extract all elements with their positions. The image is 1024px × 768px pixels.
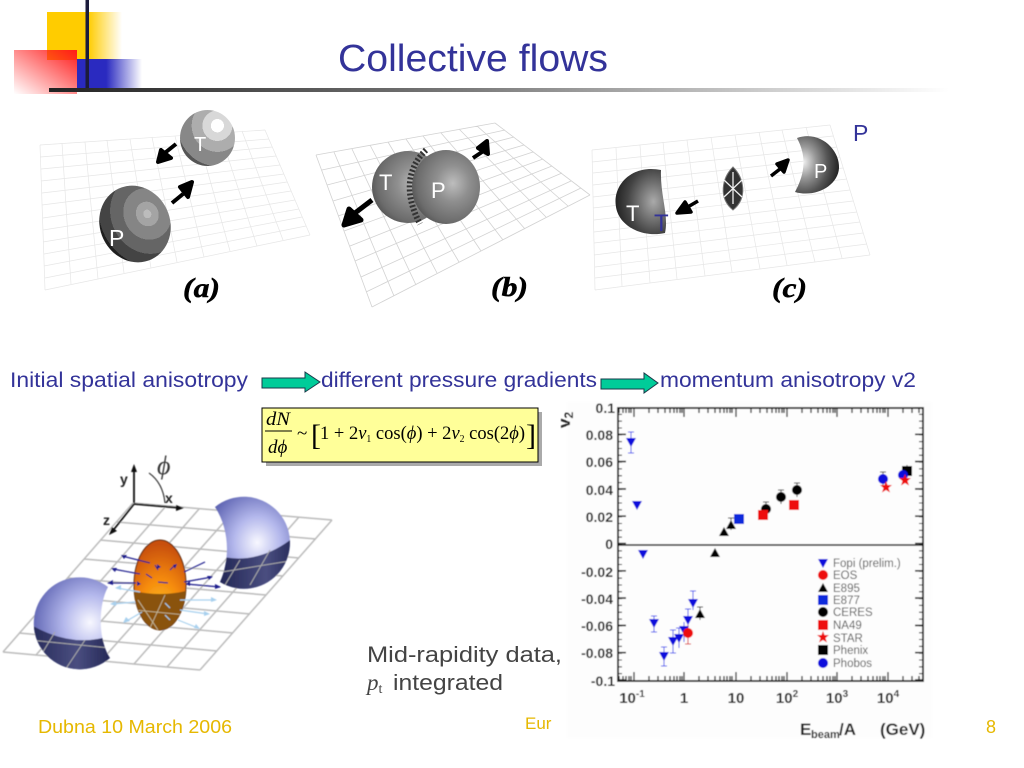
formula box: ϕ) + 2v xyxy=(407,423,460,444)
footer: date: Dubna 10 March 2006 xyxy=(38,717,232,737)
grid c xyxy=(592,125,870,290)
arrow to lower left xyxy=(158,144,176,162)
y tick labels: -0.08 xyxy=(581,645,613,661)
label z: z xyxy=(103,512,110,528)
legend: NA49 xyxy=(833,620,862,632)
y tick labels: -0.02 xyxy=(581,564,613,580)
white label T: T xyxy=(626,201,639,226)
mid-rapidity note: Mid-rapidity data, xyxy=(367,642,562,667)
label T: T xyxy=(379,170,392,195)
legend: Phenix xyxy=(833,645,868,657)
legend: E895 xyxy=(833,583,860,595)
y axis title: 2 xyxy=(562,412,576,419)
series: E895 xyxy=(695,520,736,618)
sphere P xyxy=(87,174,183,274)
formula box: ϕ) xyxy=(509,423,525,444)
statement: initial anisotropy: Initial spatial anisotropy xyxy=(10,369,249,392)
series: EOS xyxy=(683,628,693,638)
title rule xyxy=(49,88,949,92)
diagram: almond overlap with spectators xyxy=(3,451,332,680)
x tick labels: 2 xyxy=(793,689,799,700)
x ticks xyxy=(618,408,920,681)
collision speckle xyxy=(410,150,426,224)
x axis title xyxy=(800,720,925,741)
x tick labels: 10 xyxy=(776,690,793,707)
right spectator xyxy=(214,496,291,590)
chart: v2 versus beam energy xyxy=(555,400,936,741)
arrowheads navy xyxy=(107,555,221,589)
label x: x xyxy=(165,490,173,506)
panel a: approach of nuclei xyxy=(40,110,310,303)
label T: T xyxy=(194,134,206,156)
legend: STAR xyxy=(833,633,863,645)
arrow left xyxy=(677,201,698,213)
grid a xyxy=(40,130,310,290)
arrowheads light blue xyxy=(110,585,217,629)
x axis title: /A xyxy=(839,720,856,739)
x tick labels: 3 xyxy=(843,689,849,700)
footer: truncated text: Eur xyxy=(525,714,552,733)
panel b: overlap xyxy=(316,123,590,307)
blue label P: P xyxy=(853,120,868,146)
y tick labels: 0.08 xyxy=(586,427,613,443)
corner decoration xyxy=(14,0,142,94)
series: CERES xyxy=(761,485,802,514)
y tick labels xyxy=(581,400,615,689)
y tick labels: 0.02 xyxy=(586,509,613,525)
white label P: P xyxy=(814,161,827,183)
flow arrows: lower light blue xyxy=(112,588,215,628)
footer: page number: 8 xyxy=(986,717,996,737)
x tick labels: 1 xyxy=(680,690,688,707)
x axis title: E xyxy=(800,720,811,739)
statement: momentum anisotropy: momentum anisotropy v2 xyxy=(660,369,916,392)
formula box: ] xyxy=(526,419,536,452)
y tick labels: 0.1 xyxy=(596,400,615,416)
x tick labels: 4 xyxy=(894,689,900,700)
formula box: [ xyxy=(311,419,321,452)
legend: Fopi (prelim.) xyxy=(833,558,901,570)
grid b xyxy=(316,123,590,307)
phi symbol: ϕ xyxy=(157,451,170,480)
formula box xyxy=(262,408,542,466)
sphere T xyxy=(372,151,444,223)
arrow lower left xyxy=(344,200,372,225)
y tick labels: 0 xyxy=(605,536,613,552)
legend: CERES xyxy=(833,607,873,619)
y tick labels: 0.06 xyxy=(586,454,613,470)
x tick labels: 10 xyxy=(826,690,843,707)
error bars xyxy=(628,432,696,666)
mid-rapidity note xyxy=(365,642,562,697)
series: Phenix xyxy=(902,466,912,476)
legend: Phobos xyxy=(833,658,872,670)
arrow: green 2 xyxy=(601,373,658,393)
coordinate axes xyxy=(111,468,181,533)
legend: E877 xyxy=(833,595,860,607)
reaction plane grid xyxy=(3,503,332,670)
legend: EOS xyxy=(833,570,858,582)
error bar red xyxy=(685,625,691,644)
axis labels: y xyxy=(120,471,128,487)
y tick labels: -0.1 xyxy=(591,673,615,689)
zero line xyxy=(618,544,923,546)
arrow to upper right xyxy=(172,182,192,203)
series: E877 xyxy=(734,514,744,524)
x tick labels: 10 xyxy=(877,690,894,707)
sphere T xyxy=(180,110,235,166)
legend xyxy=(817,558,901,670)
label b: (b) xyxy=(491,272,528,302)
x axis title: beam xyxy=(811,729,840,741)
x tick labels: 10 xyxy=(728,690,744,707)
series: Fopi xyxy=(626,438,698,661)
formula box: dϕ xyxy=(268,437,288,458)
y tick labels: -0.06 xyxy=(581,618,613,634)
series: NA49 xyxy=(758,500,799,520)
formula box: dN xyxy=(266,409,291,430)
flow arrows: upper navy xyxy=(108,556,220,587)
fragment P xyxy=(795,136,839,194)
y tick labels: 0.04 xyxy=(586,482,613,498)
series: Phobos xyxy=(878,470,908,484)
blue label T: T xyxy=(654,210,669,237)
orange fireball xyxy=(132,538,188,632)
x tick labels xyxy=(619,689,900,707)
fragment T xyxy=(615,169,666,234)
error bars black xyxy=(697,465,907,620)
label P: P xyxy=(431,178,446,203)
fireball arrows xyxy=(724,172,742,204)
y tick labels: -0.04 xyxy=(581,591,613,607)
y axis title: v xyxy=(555,419,574,428)
panel c: separation xyxy=(592,120,870,303)
formula box: 1 xyxy=(366,434,371,445)
series: STAR xyxy=(880,474,911,492)
x axis title: (GeV) xyxy=(880,720,925,739)
formula box: cos( xyxy=(371,423,407,444)
x tick labels: 10 xyxy=(619,690,636,707)
arrow: green 1 xyxy=(262,372,320,392)
left spectator xyxy=(33,576,110,670)
arrow upper right xyxy=(473,141,488,158)
formula box: 1 + 2v xyxy=(320,423,367,444)
formula box: ~ xyxy=(297,423,307,444)
label c: (c) xyxy=(772,273,807,303)
axis arrowheads xyxy=(109,464,184,535)
sphere P xyxy=(412,150,480,224)
label a: (a) xyxy=(183,273,220,303)
mid-rapidity note: t xyxy=(378,682,382,697)
almond fireball xyxy=(723,167,743,210)
plot frame xyxy=(618,408,923,681)
label P: P xyxy=(109,225,124,251)
mid-rapidity note: p xyxy=(367,670,378,695)
formula box: cos(2 xyxy=(465,423,509,444)
mid-rapidity note: integrated xyxy=(393,670,503,695)
formula box: 2 xyxy=(460,434,465,445)
phi angle arc xyxy=(149,473,165,503)
arrow right xyxy=(771,160,788,176)
y ticks xyxy=(620,407,921,682)
statement: pressure gradients: different pressure gradients xyxy=(321,369,597,392)
title: Collective flows xyxy=(338,38,608,80)
x tick labels: -1 xyxy=(636,689,645,700)
